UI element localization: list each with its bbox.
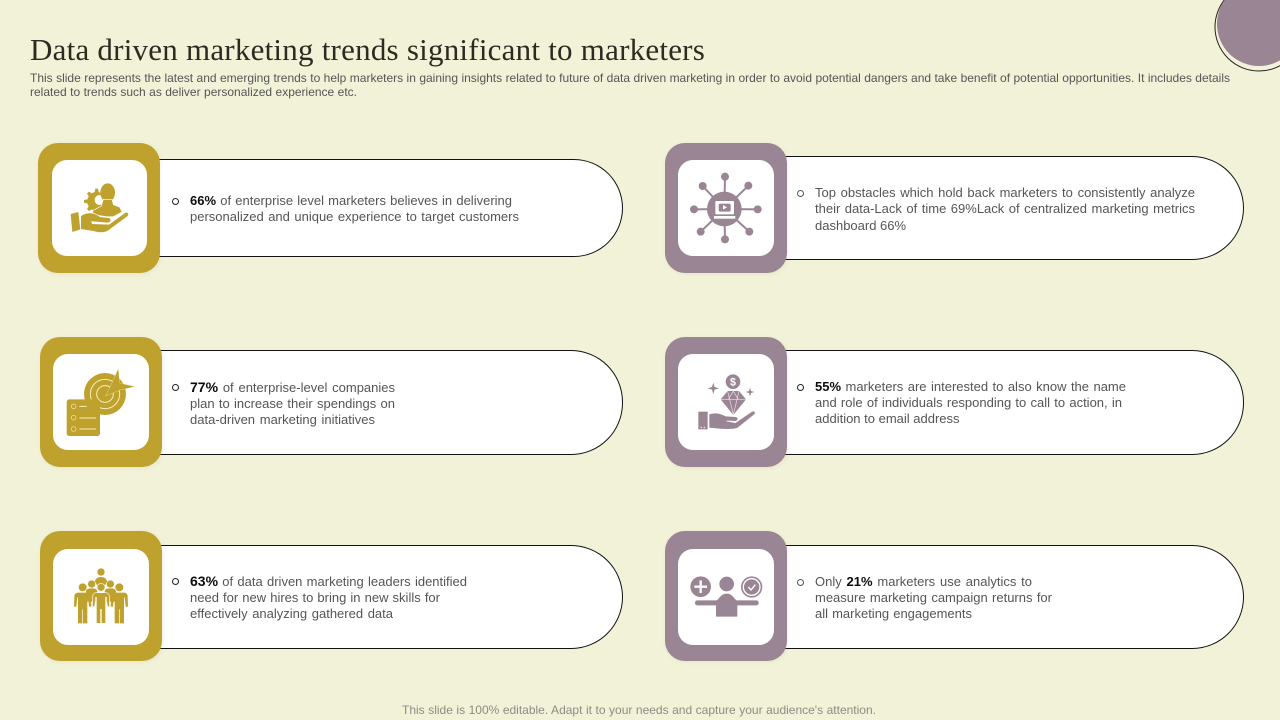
icon: network with monitor [690, 172, 762, 244]
icon card: mauve frame [665, 531, 787, 661]
icon card: mauve frame [665, 337, 787, 467]
bullet [172, 384, 179, 391]
text: 77%: 77% of enterprise-level companies [190, 379, 395, 395]
panel: 77% spendings: data-driven marketing initiatives [190, 412, 375, 427]
pill: text container [725, 350, 1244, 455]
icon card: gold frame [40, 531, 162, 661]
pill: text container [108, 159, 623, 257]
bullet [797, 579, 804, 586]
icon card: gold frame [38, 143, 160, 273]
text: 21%: Only 21% marketers use analytics to [815, 574, 1032, 589]
panel: 66% personalized experience [38, 143, 623, 274]
icon card: gold frame [40, 337, 162, 467]
icon: hand holding diamond [698, 374, 755, 430]
subtitle description: related to trends such as deliver personalized experience etc. [30, 85, 357, 99]
decorative corner circle [1214, 0, 1280, 72]
footer note: This slide is 100% editable. Adapt it to your needs and capture your audience's attention. [402, 703, 876, 717]
subtitle description: This slide represents the latest and emerging trends to help marketers in gaining insights related to future of data driven marketing in order to avoid potential dangers and take benefit of potential opportunities. It includes details [30, 71, 1230, 85]
bullet [797, 384, 804, 391]
pill: text container [725, 545, 1244, 649]
panel: 55% marketers: addition to email address [815, 411, 960, 426]
panel: top obstacles: their data-Lack of time 69%Lack of centralized marketing metrics [815, 201, 1195, 216]
panel: 21% analytics: measure marketing campaign returns for [815, 590, 1052, 605]
panel: 77% spendings [40, 337, 623, 468]
pill: text container [108, 545, 623, 649]
pill: text container [725, 156, 1244, 260]
text: obstacles: Top obstacles which hold back marketers to consistently analyze [815, 185, 1195, 200]
bullet [172, 578, 179, 585]
panel: 63% leaders: effectively analyzing gathered data [190, 606, 393, 621]
icon tile [678, 354, 774, 450]
icon: hand holding person with gear [70, 183, 128, 233]
icon: target and checklist [66, 368, 135, 436]
panel: top obstacles: dashboard 66% [815, 218, 906, 233]
text: 55%: 55% marketers are interested to also know the name [815, 379, 1126, 394]
panel: 21% analytics [665, 531, 1244, 662]
bullet [797, 190, 804, 197]
panel: 63% leaders [40, 531, 623, 662]
panel: top obstacles [665, 143, 1244, 274]
subtitle description [30, 71, 1230, 99]
panel: 66% personalized experience: personalized and unique experience to target customers [190, 209, 519, 224]
text: 66%: 66% of enterprise level marketers believes in delivering [190, 193, 512, 208]
icon tile [52, 160, 147, 256]
pill: text container [108, 350, 623, 455]
panel: 77% spendings: plan to increase their spendings on [190, 396, 395, 411]
text: 63%: 63% of data driven marketing leaders identified [190, 573, 467, 589]
bullet [172, 198, 179, 205]
panel: 55% marketers: and role of individuals responding to call to action, in [815, 395, 1122, 410]
icon tile [53, 549, 149, 645]
icon: group of people [74, 568, 128, 624]
icon tile [678, 549, 774, 645]
icon: person weighing plus and badge [690, 576, 762, 617]
icon tile [678, 160, 774, 256]
icon card: mauve frame [665, 143, 787, 273]
icon tile [53, 354, 149, 450]
panel: 63% leaders: need for new hires to bring in new skills for [190, 590, 440, 605]
panel: 55% marketers [665, 337, 1244, 468]
title: Data driven marketing trends significant to marketers [30, 32, 705, 67]
icon: hand holding diamond: $ [730, 376, 736, 388]
panel: 21% analytics: all marketing engagements [815, 606, 972, 621]
